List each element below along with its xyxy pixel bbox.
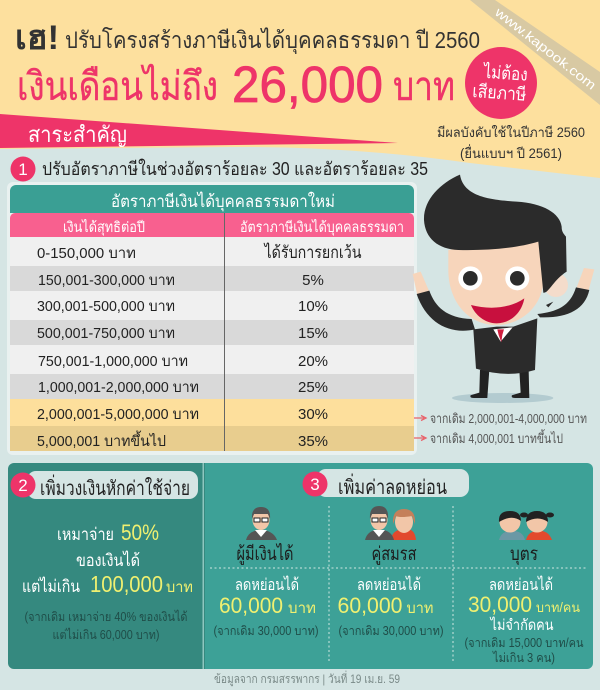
heading 1: ปรับอัตราภาษีในช่วงอัตราร้อยละ 30 และอัตราร้อยละ 35 — [42, 158, 428, 179]
panel 3: allowances — [202, 463, 593, 669]
heading 2: เพิ่มวงเงินหักค่าใช้จ่าย — [40, 474, 190, 500]
tax table: 5,000,001 บาทขึ้นไป — [37, 430, 166, 450]
tax table: 300,001-500,000 บาท — [37, 299, 175, 315]
column 2: spouse: 60,000 — [338, 593, 402, 618]
deduction amount text: 50% — [121, 520, 159, 545]
tax table: ได้รับการยกเว้น — [263, 242, 362, 262]
column 3: children: 30,000 — [468, 592, 532, 617]
badge: no tax: ไม่ต้อง — [481, 61, 528, 85]
previous deduction note — [24, 610, 188, 642]
tax table: อัตราภาษีเงินได้บุคคลธรรมดา — [240, 218, 404, 236]
deduction amount text: บาท — [166, 579, 193, 596]
column 3: children: บาท/คน — [536, 600, 580, 615]
deduction amount text: 100,000 — [90, 571, 163, 597]
previous deduction note: แต่ไม่เกิน 60,000 บาท) — [52, 628, 160, 642]
tax table: 750,001-1,000,000 บาท — [38, 354, 188, 370]
column 1: taxpayer: ลดหย่อนได้ — [235, 575, 299, 594]
column 3: children: ไม่จำกัดคน — [490, 616, 554, 634]
tax table: 5% — [302, 272, 324, 289]
tax table: 150,001-300,000 บาท — [38, 273, 175, 289]
tax table: อัตราภาษีเงินได้บุคคลธรรมดาใหม่ — [111, 191, 335, 212]
column 3: children: ลดหย่อนได้ — [489, 575, 553, 594]
tax table — [7, 182, 417, 455]
banner: key points: สาระสำคัญ — [28, 122, 127, 147]
title: ปรับโครงสร้างภาษีเงินได้บุคคลธรรมดา ปี 2560 — [65, 27, 480, 54]
ribbon: website: www.kapook.com — [491, 4, 599, 93]
effective date note — [437, 124, 585, 161]
heading 1: 1 — [18, 160, 28, 179]
icon: couple — [365, 506, 416, 540]
headline: บาท — [393, 65, 455, 109]
footer source: ข้อมูลจาก กรมสรรพากร | วันที่ 19 เม.ย. 59 — [214, 670, 400, 687]
column 3: children: บุตร — [510, 544, 538, 566]
column 1: taxpayer: บาท — [288, 600, 316, 617]
deduction amount text: เหมาจ่าย — [57, 525, 114, 544]
tax table: 30% — [298, 406, 328, 423]
tax table: 0-150,000 บาท — [37, 246, 136, 262]
column 2: spouse: บาท — [406, 600, 434, 617]
heading 3: 3 — [310, 475, 320, 494]
deduction amount text — [22, 520, 193, 597]
tax table: 500,001-750,000 บาท — [37, 326, 175, 342]
column 1: taxpayer: 60,000 — [219, 593, 283, 618]
tax table: 20% — [298, 353, 328, 370]
deduction amount text: แต่ไม่เกิน — [22, 576, 80, 596]
ribbon: website — [470, 0, 600, 105]
tax table: 10% — [298, 298, 328, 315]
arrow note: 35% bracket — [414, 429, 563, 446]
heading 2: 2 — [18, 476, 28, 495]
headline: 26,000 — [232, 56, 383, 113]
title: เฮ! — [15, 19, 59, 57]
tax table: 35% — [298, 433, 328, 450]
heading 3: เพิ่มค่าลดหย่อน — [338, 473, 447, 499]
deduction amount text: ของเงินได้ — [76, 550, 140, 570]
column 1: taxpayer: (จากเดิม 30,000 บาท) — [214, 624, 318, 638]
effective date note: (ยื่นแบบฯ ปี 2561) — [460, 144, 562, 161]
icon: children — [499, 511, 554, 540]
panel 2: expense deduction — [8, 463, 205, 669]
heading 1 — [10, 156, 428, 182]
badge: no tax — [465, 47, 537, 119]
heading 2 — [10, 471, 198, 500]
headline: เงินเดือนไม่ถึง — [17, 64, 218, 109]
column 2: spouse: คู่สมรส — [372, 544, 417, 565]
column 3: children: (จากเดิม 15,000 บาท/คน — [464, 636, 584, 650]
illustration: happy businessman — [413, 175, 594, 403]
title — [15, 19, 480, 57]
column 1: taxpayer — [214, 543, 318, 638]
column 2: spouse — [338, 544, 444, 638]
column 1: taxpayer: ผู้มีเงินได้ — [236, 543, 294, 565]
tax table: 25% — [298, 379, 328, 396]
tax table: 15% — [298, 325, 328, 342]
badge: no tax: เสียภาษี — [472, 81, 527, 105]
effective date note: มีผลบังคับใช้ในปีภาษี 2560 — [437, 124, 585, 140]
banner: key points — [0, 114, 398, 148]
tax table: เงินได้สุทธิต่อปี — [63, 218, 145, 236]
heading 3 — [302, 469, 469, 499]
tax table: 2,000,001-5,000,000 บาท — [37, 407, 199, 423]
headline — [17, 56, 455, 113]
column 3: children — [464, 544, 584, 665]
previous deduction note: (จากเดิม เหมาจ่าย 40% ของเงินได้ — [24, 610, 188, 624]
icon: taxpayer — [246, 507, 277, 540]
column 2: spouse: ลดหย่อนได้ — [357, 575, 421, 594]
arrow note: 35% bracket: จากเดิม 4,000,001 บาทขึ้นไป — [430, 429, 563, 446]
column 2: spouse: (จากเดิม 30,000 บาท) — [338, 624, 444, 638]
column 3: children: ไม่เกิน 3 คน) — [492, 651, 555, 665]
tax table: 1,000,001-2,000,000 บาท — [38, 380, 199, 396]
